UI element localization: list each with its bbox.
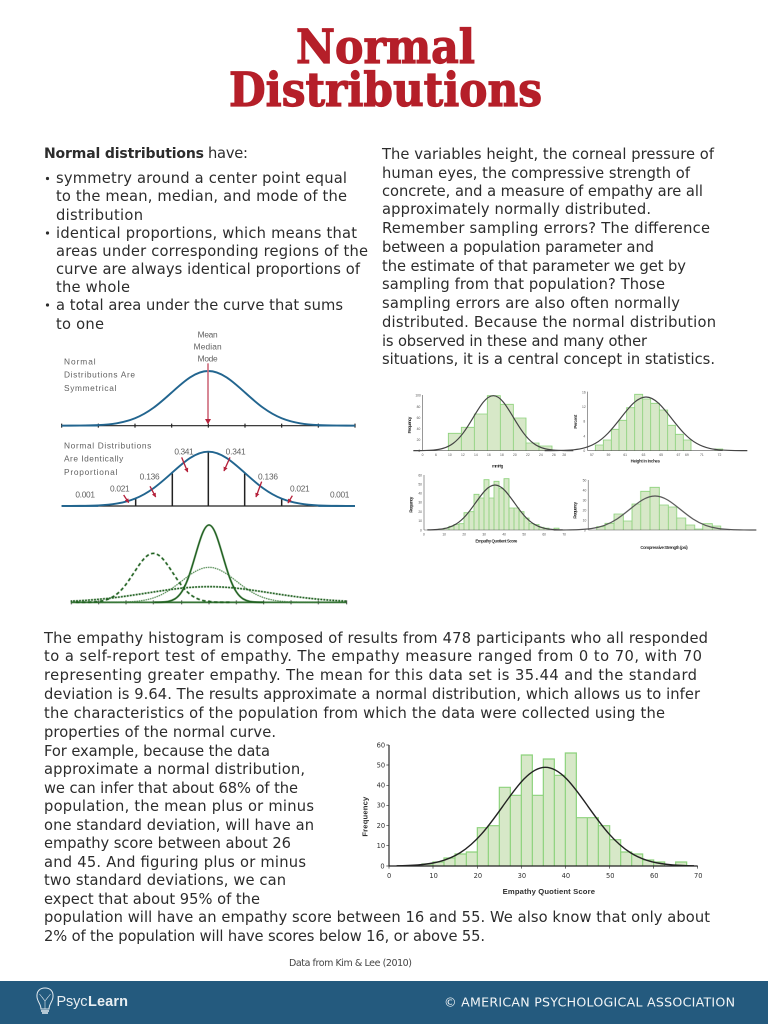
bullet list: symmetry around a center point equal — [56, 170, 347, 187]
text block: normal distributions have: have: — [208, 145, 248, 162]
text block: variables that are normally distributed — [381, 146, 716, 368]
chart: normal distributions are identically proportional: 0.136 — [140, 471, 160, 481]
histogram: mmHg: 20 — [417, 438, 421, 442]
histogram: compressive strength: Compressive Strength (psi) — [640, 545, 688, 550]
histogram: height in inches: 12 — [582, 405, 586, 409]
histogram: empathy quotient score: 10 — [418, 519, 422, 523]
text block: variables that are normally distributed: the estimate of that parameter we get by — [382, 258, 686, 275]
bullet list: to one — [56, 316, 104, 333]
normal curve — [397, 767, 694, 866]
text block: empathy histogram description: representing greater empathy. The mean for this data set is 35.44 and the standard — [44, 667, 697, 684]
histogram: mmHg: 28 — [562, 453, 566, 457]
histogram: height in inches: 71 — [700, 453, 704, 457]
text block: variables that are normally distributed: concrete, and a measure of empathy are all — [382, 183, 703, 200]
chart: normal distributions are symmetrical — [62, 330, 355, 428]
chart: normal distributions are identically proportional: 0.021 — [110, 483, 130, 493]
histogram: mmHg: 100 — [415, 394, 421, 398]
text block: empathy histogram description: empathy score between about 26 — [44, 835, 291, 852]
large histogram: empathy quotient score: Empathy Quotient Score — [503, 887, 595, 896]
histogram: empathy quotient score: 50 — [522, 533, 526, 537]
histogram: mmHg: 10 — [448, 453, 452, 457]
large histogram: empathy quotient score — [361, 741, 702, 896]
histogram: height in inches: 0 — [583, 449, 585, 453]
histogram: compressive strength: 0 — [584, 528, 586, 532]
histogram: empathy quotient score: 60 — [418, 473, 422, 477]
histogram: height in inches: 63 — [642, 453, 646, 457]
chart: normal distributions are symmetrical: Mode — [198, 354, 218, 364]
title: Normal — [296, 19, 475, 74]
chart: normal distributions are identically proportional: 0.021 — [290, 483, 310, 493]
histogram: mmHg: 60 — [417, 416, 421, 420]
text block: normal distributions have — [44, 145, 368, 333]
text block: empathy histogram description: expect that about 95% of the — [44, 891, 260, 908]
large histogram: empathy quotient score: 40 — [377, 782, 385, 790]
bullet list: the whole — [56, 279, 130, 296]
bullet list: identical proportions, which means that — [56, 225, 357, 242]
histogram: compressive strength: 30 — [583, 498, 587, 502]
text block: empathy histogram description: the characteristics of the population from which the data were collected using the — [44, 705, 665, 722]
histogram: mmHg: 16 — [487, 453, 491, 457]
histogram: height in inches: 65 — [659, 453, 663, 457]
large histogram: empathy quotient score: 0 — [387, 872, 391, 880]
histogram: empathy quotient score: 30 — [418, 501, 422, 505]
large histogram: empathy quotient score: 40 — [562, 872, 570, 880]
text block: empathy histogram description — [43, 630, 710, 945]
text block: normal distributions have: Normal distributions — [44, 146, 204, 162]
large histogram: empathy quotient score: 50 — [606, 872, 614, 880]
bullet list: distribution — [56, 207, 143, 224]
histogram: height in inches: 67 — [677, 453, 681, 457]
large histogram: empathy quotient score: 60 — [650, 872, 658, 880]
histogram: empathy quotient score: 0 — [420, 528, 422, 532]
text block: empathy histogram description: properties of the normal curve. — [44, 724, 276, 741]
large histogram: empathy quotient score: Frequency — [361, 796, 370, 837]
histogram: empathy quotient score: 20 — [418, 510, 422, 514]
chart: normal distributions are identically proportional: Proportional — [64, 467, 117, 477]
histogram: empathy quotient score — [409, 473, 566, 544]
histogram: mmHg: 40 — [417, 427, 421, 431]
histogram: empathy quotient score: 20 — [462, 533, 466, 537]
text block: empathy histogram description: population will have an empathy score between 16 and 55. We also know that only about — [44, 909, 710, 926]
bullet list: a total area under the curve that sums — [56, 297, 343, 314]
histogram: empathy quotient score: 10 — [442, 533, 446, 537]
histogram: empathy quotient score: Empathy Quotient Score — [475, 539, 518, 544]
text block: empathy histogram description: 2% of the population will have scores below 16, or above 55. — [44, 928, 485, 945]
bullet list — [46, 170, 368, 333]
histogram: compressive strength: 50 — [583, 478, 587, 482]
icon: light bulb — [37, 988, 53, 1013]
text block: variables that are normally distributed: is observed in these and many other — [382, 333, 648, 350]
histogram bars — [422, 753, 687, 866]
histogram: mmHg: 20 — [513, 453, 517, 457]
histogram: empathy quotient score: 50 — [418, 482, 422, 486]
text block: empathy histogram description: one standard deviation, will have an — [44, 817, 314, 834]
chart: normal distributions are symmetrical: Mean — [198, 330, 218, 340]
histogram: compressive strength: Frequency — [573, 501, 578, 519]
histogram: mmHg: 14 — [474, 453, 478, 457]
chart: normal distributions are identically proportional: 0.001 — [75, 490, 95, 500]
chart: normal distributions are identically proportional: 0.341 — [174, 446, 194, 456]
histogram: height in inches: 72 — [718, 453, 722, 457]
histogram: mmHg: 12 — [461, 453, 465, 457]
text block: variables that are normally distributed: Remember sampling errors? The difference — [382, 220, 710, 237]
text block: empathy histogram description: we can infer that about 68% of the — [44, 780, 298, 797]
chart: normal distributions are symmetrical: Median — [194, 342, 222, 352]
chart: normal distributions are symmetrical: Distributions Are — [64, 370, 135, 380]
source note: Data from Kim & Lee (2010) — [289, 958, 412, 969]
large histogram: empathy quotient score: 10 — [429, 872, 438, 880]
histogram: empathy quotient score: 40 — [418, 492, 422, 496]
histogram: mmHg: 80 — [417, 405, 421, 409]
chart: normal distributions are symmetrical: Normal — [64, 356, 96, 366]
chart: green overlapping normal curves — [70, 524, 348, 604]
large histogram: empathy quotient score: 20 — [377, 822, 385, 830]
chart: normal distributions are identically proportional — [62, 440, 355, 506]
histogram: empathy quotient score: Frequency — [409, 496, 414, 513]
title: Distributions — [229, 62, 542, 117]
histogram: mmHg: 0 — [422, 453, 424, 457]
histogram: mmHg: 6 — [435, 453, 437, 457]
histogram: height in inches: 61 — [623, 453, 627, 457]
histogram: compressive strength — [554, 478, 756, 550]
histogram: mmHg — [407, 394, 573, 469]
text block: variables that are normally distributed: distributed. Because the normal distribution — [382, 314, 716, 331]
logo wordmark — [56, 994, 128, 1010]
text block: empathy histogram description: For example, because the data — [44, 743, 270, 760]
histogram: mmHg: mmHg — [492, 464, 504, 469]
histogram: empathy quotient score: 30 — [482, 533, 486, 537]
logo wordmark: Learn — [88, 994, 128, 1010]
histogram: mmHg: 22 — [526, 453, 530, 457]
histogram: empathy quotient score: 70 — [562, 533, 566, 537]
histogram: height in inches: Percent — [573, 414, 578, 429]
large histogram: empathy quotient score: 0 — [380, 862, 385, 870]
text block: variables that are normally distributed: The variables height, the corneal pressure of — [381, 146, 715, 163]
chart: normal distributions are symmetrical: Symmetrical — [64, 383, 116, 393]
bullet list: areas under corresponding regions of the — [56, 243, 368, 260]
text block: variables that are normally distributed: sampling errors are also often normally — [382, 295, 680, 312]
text block: empathy histogram description: and 45. And figuring plus or minus — [44, 854, 306, 871]
histogram: empathy quotient score: 60 — [542, 533, 546, 537]
text block: empathy histogram description: deviation is 9.64. The results approximate a normal distribution, which allows us to infer — [44, 686, 701, 703]
chart: normal distributions are identically proportional: Are Identically — [64, 454, 124, 464]
bullet list: to the mean, median, and mode of the — [56, 188, 347, 205]
text block: variables that are normally distributed: situations, it is a central concept in statistics. — [382, 351, 715, 368]
histogram: height in inches: 16 — [582, 390, 586, 394]
chart: normal distributions are identically proportional: 0.341 — [226, 446, 246, 456]
chart: normal distributions are identically proportional: 0.136 — [258, 471, 278, 481]
text block: variables that are normally distributed: sampling from that population? Those — [382, 276, 665, 293]
large histogram: empathy quotient score: 20 — [474, 872, 482, 880]
histogram: compressive strength: 20 — [583, 508, 587, 512]
histogram: compressive strength: 40 — [583, 488, 587, 492]
histogram: height in inches: Height in Inches — [631, 459, 661, 464]
chart: normal distributions are identically proportional: 0.001 — [330, 490, 350, 500]
histogram: empathy quotient score: 40 — [502, 533, 506, 537]
large histogram: empathy quotient score: 10 — [377, 842, 385, 850]
histogram: mmHg: Frequency — [407, 416, 412, 433]
histogram: height in inches: 4 — [583, 434, 585, 438]
footer band — [0, 981, 768, 1024]
text block: empathy histogram description: population, the mean plus or minus — [44, 798, 314, 815]
histogram: mmHg: 18 — [500, 453, 504, 457]
histogram: mmHg: 0 — [418, 449, 420, 453]
text block: variables that are normally distributed: between a population parameter and — [382, 239, 654, 256]
large histogram: empathy quotient score: 60 — [377, 741, 385, 749]
histogram: height in inches: 8 — [583, 420, 585, 424]
text block: variables that are normally distributed: human eyes, the compressive strength of — [382, 165, 691, 182]
chart: normal distributions are identically proportional: Normal Distributions — [64, 440, 151, 450]
text block: empathy histogram description: to a self-report test of empathy. The empathy measure ranged from 0 to 70, with 70 — [44, 648, 702, 665]
text block: empathy histogram description: approximate a normal distribution, — [44, 761, 305, 778]
text block: empathy histogram description: The empathy histogram is composed of results from 478 participants who all responded — [43, 630, 708, 647]
copyright: © AMERICAN PSYCHOLOGICAL ASSOCIATION — [444, 994, 735, 1010]
logo wordmark: Psyc — [56, 994, 88, 1010]
histogram: mmHg: 26 — [552, 453, 556, 457]
title — [229, 19, 542, 117]
large histogram: empathy quotient score: 30 — [377, 802, 385, 810]
histogram: height in inches: 57 — [590, 453, 594, 457]
histogram: compressive strength: 10 — [583, 518, 587, 522]
large histogram: empathy quotient score: 70 — [694, 872, 702, 880]
large histogram: empathy quotient score: 50 — [377, 761, 385, 769]
histogram: height in inches — [545, 390, 747, 464]
histogram: height in inches: 59 — [607, 453, 611, 457]
text block: variables that are normally distributed: approximately normally distributed. — [382, 201, 651, 218]
histogram: height in inches: 69 — [685, 453, 689, 457]
histogram: empathy quotient score: 0 — [423, 533, 425, 537]
large histogram: empathy quotient score: 30 — [518, 872, 526, 880]
text block: empathy histogram description: two standard deviations, we can — [44, 872, 286, 889]
histogram: mmHg: 24 — [539, 453, 543, 457]
bullet list: curve are always identical proportions of — [56, 261, 361, 278]
